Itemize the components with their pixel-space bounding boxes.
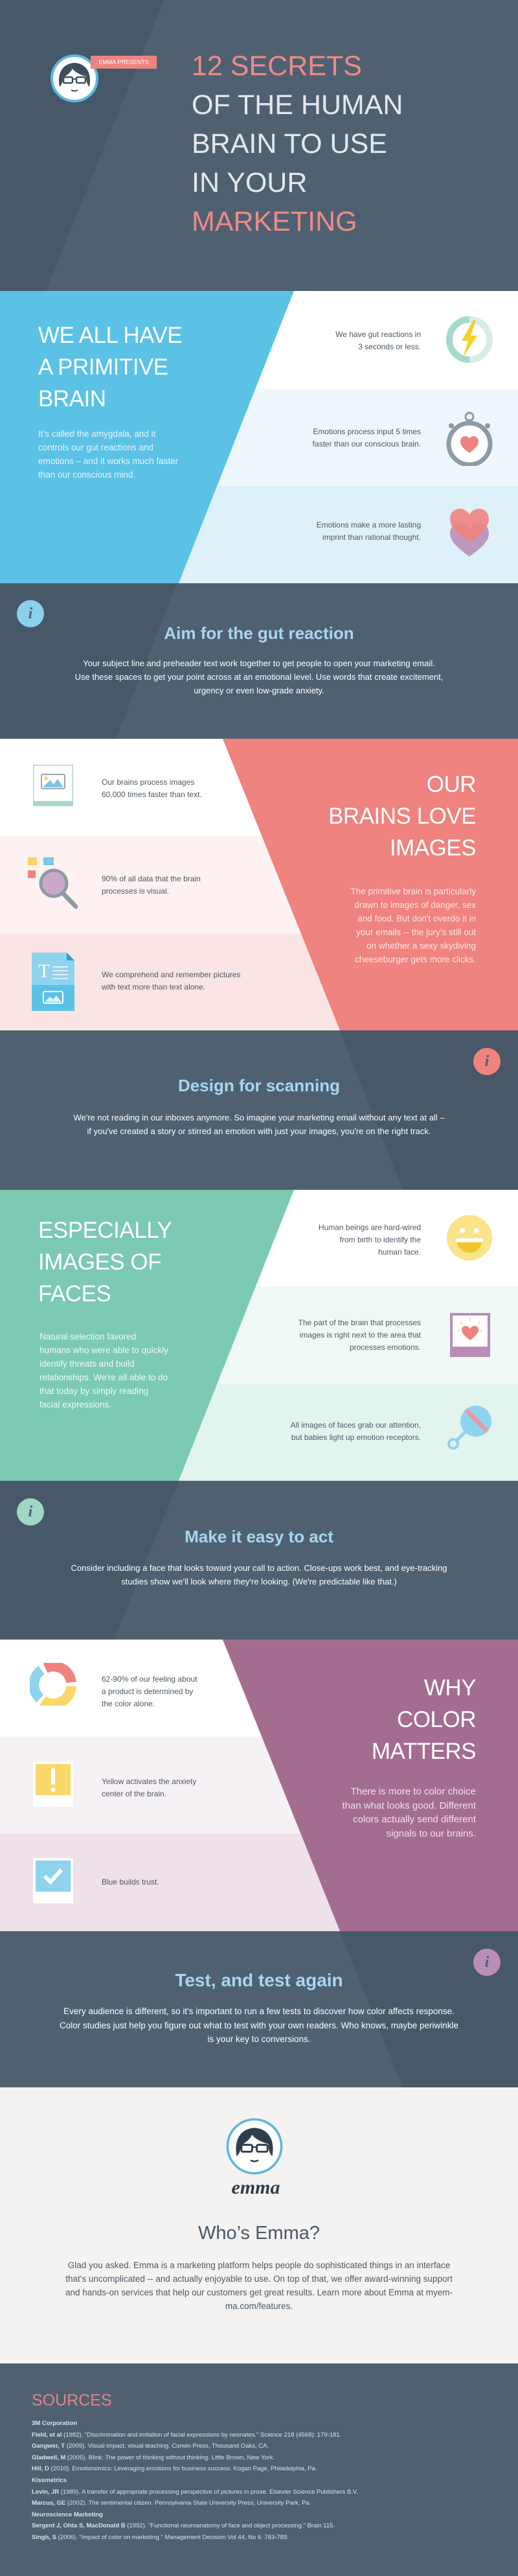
text: source list [32, 2420, 358, 2541]
text: yellow anxiety [102, 1777, 197, 1798]
panel: especially images of faces [0, 1190, 518, 1481]
panel: aim for the gut reaction [0, 583, 518, 739]
text: yellow anxiety: Yellow activates the anxiety [102, 1777, 196, 1786]
heading: who's emma: Who’s Emma? [198, 2223, 320, 2244]
panel: test and test again [0, 1931, 518, 2087]
text: source list: Sergent J, Ohta S, MacDonald B (1992). "Functional neuroanatomy of face and object processing." Brain 115. [32, 2522, 335, 2529]
text: primitive brain drawn: The primitive brain is partic­ularly drawn to images of danger, sex and food. But don't overdo it in your emails -- the jury's still out on whether a sexy skydiv­ing cheeseburger gets more clicks. [350, 887, 476, 964]
icon: stopwatch [447, 412, 492, 466]
text: color choice: There is more to color choice than what looks good. Different colors actually send different signals to our brains. [342, 1786, 476, 1839]
text: blue trust: Blue builds trust. [102, 1877, 159, 1886]
text: act body [71, 1563, 447, 1586]
heading: why color matters [372, 1675, 476, 1764]
heading: make it easy to act: Make it easy to act [185, 1527, 333, 1546]
text: hard-wired: from birth to identify the [340, 1235, 421, 1244]
text: act body: Consider including a face that looks toward your call to action. Close-ups work best, and eye-tracking [71, 1563, 447, 1573]
title: BRAIN TO USE [192, 128, 387, 159]
icon: info green [17, 1498, 44, 1526]
text: amygdala: It’s called the amygdala, and it controls our gut reactions and emotions – and it works much faster than our conscious mind. [38, 429, 178, 480]
text: source list: Marcus, GE (2002). The sentimental citizen. Pennsylvania State University Press, University Park, Pa. [32, 2500, 311, 2507]
text: emma body: Glad you asked. Emma is a marketing platform helps people do sophisticated things in an interface [68, 2260, 450, 2270]
text: hard-wired: human face. [378, 1247, 421, 1257]
text: act body: studies show we'll look where they're looking. (We're predictable like that.) [121, 1577, 397, 1586]
title: 12 SECRETS [192, 51, 362, 82]
icon: info green: i [28, 1503, 32, 1520]
title: OF THE HUMAN [192, 89, 403, 121]
panel: sources [0, 2363, 518, 2576]
text: 90% visual: 90% of all data that the brain [102, 874, 201, 883]
text: aim body: Your subject line and preheader text work together to get people to open your marketing email. [83, 658, 435, 668]
icon: two hearts [450, 509, 489, 557]
text: source list: Kissmetrics [32, 2477, 67, 2484]
text: test body: Color studies just help you figure out what to test with your own readers. Who knows, maybe periwinkle [60, 2021, 458, 2030]
icon: color donut [30, 1663, 76, 1706]
panel: our brains love images [0, 739, 518, 1030]
text: emma body: and hands-on services that help our customers get great results. Learn more about Emma at myem- [65, 2288, 453, 2297]
text: hard-wired [319, 1223, 421, 1257]
text: scanning body [73, 1113, 445, 1136]
panel: why color matters [0, 1640, 518, 1931]
text: emma body [65, 2260, 453, 2311]
text: brain processes images next to emotions: The part of the brain that processes [298, 1318, 421, 1327]
title [192, 51, 403, 237]
text: natural selection: Natural selection favored humans who were able to quickly identify threats and build relationships. We're all able to do that today by simply reading facial expressions. [39, 1332, 168, 1410]
icon: magnifier [28, 857, 78, 909]
icon: emma logo [227, 2118, 282, 2175]
text: babies [290, 1421, 421, 1442]
heading: especially images of faces: ESPECIALLY [38, 1218, 172, 1243]
icon: info pink [473, 1048, 501, 1075]
icon: emma avatar [51, 54, 98, 102]
heading: why color matters: COLOR [397, 1707, 476, 1732]
heading: design for scanning: Design for scanning [178, 1076, 340, 1095]
title: IN YOUR [192, 167, 307, 198]
panel: design for scanning [0, 1030, 518, 1190]
heading: test and test again: Test, and test again [175, 1970, 343, 1990]
text: 90% visual [102, 874, 201, 896]
text: source list: Field, et al (1982). "Discrimination and imitation of facial expressions by neonates." Science 218 (4568): 179-181. [32, 2431, 341, 2439]
heading: why color matters: MATTERS [372, 1739, 476, 1764]
text: source list: 3M Corporation [32, 2420, 77, 2427]
text: pictures with text: We comprehend and remember pictures [102, 970, 241, 979]
text: brain processes images next to emotions [298, 1318, 421, 1352]
text: emotions 5 times [312, 427, 421, 448]
text: hard-wired: Human beings are hard-wired [319, 1223, 421, 1232]
icon: info blue: i [28, 605, 32, 622]
icon: rattle [447, 1406, 491, 1450]
badge: emma presents [91, 56, 157, 69]
badge: emma presents: EMMA PRESENTS [98, 59, 149, 65]
text: emma body: that's uncomplicated -- and actually enjoyable to use. On top of that, we offer award-winning support [65, 2274, 453, 2284]
heading: especially images of faces [38, 1218, 172, 1306]
text: 60,000 times [102, 778, 202, 799]
text: gut reactions: We have gut reactions in [335, 330, 421, 339]
heading: our brains love images: BRAINS LOVE [328, 804, 476, 829]
icon: info pink: i [485, 1053, 489, 1070]
icon: yellow alert [33, 1761, 73, 1807]
text: aim body [75, 658, 443, 695]
text: pictures with text [102, 970, 241, 992]
icon: picture frame [33, 765, 73, 806]
heading: our brains love images: OUR [427, 772, 476, 797]
heading: we all have a primitive brain: BRAIN [38, 386, 106, 412]
icon: heart frame [450, 1313, 490, 1357]
icon: document: T [38, 960, 50, 982]
heading: our brains love images [328, 772, 476, 861]
text: test body [60, 2006, 458, 2044]
text: gut reactions: 3 seconds or less. [358, 342, 421, 351]
text: test body: is your key to conversions. [207, 2034, 311, 2044]
text: lasting imprint: imprint than rational thought. [322, 533, 421, 542]
title: MARKETING [192, 206, 357, 237]
text: source list: Singh, S (2006). "Impact of color on marketing." Management Decision Vol 44, No 6: 783-789. [32, 2534, 289, 2541]
icon: info blue [17, 600, 44, 627]
text: aim body: Use these spaces to get your point across at an emotional level. Use words that create excitement, [75, 672, 443, 682]
text: test body: Every audience is different, so it's important to run a few tests to discover how color affects response. [63, 2006, 455, 2016]
heading: especially images of faces: IMAGES OF [38, 1249, 161, 1275]
heading: we all have a primitive brain [38, 323, 182, 412]
heading: our brains love images: IMAGES [390, 835, 476, 861]
text: lasting imprint [317, 520, 421, 542]
text: lasting imprint: Emotions make a more lasting [317, 520, 421, 529]
icon: blue check [33, 1858, 73, 1903]
text: 90% visual: processes is visual. [102, 887, 169, 896]
icon: smiley [447, 1215, 492, 1260]
icon: info purple: i [485, 1954, 489, 1971]
heading: aim for the gut reaction: Aim for the gut reaction [164, 623, 354, 643]
heading: we all have a primitive brain: A PRIMITIVE [38, 354, 168, 380]
text: scanning body: if you've created a story or stirred an emotion with just your images, you're on the right track. [87, 1126, 431, 1136]
text: source list: Gangwer, T (2009). Visual impact, visual teaching. Corwin Press, Thousand Oaks, CA. [32, 2443, 269, 2450]
text: emotions 5 times: faster than our conscious brain. [313, 439, 421, 448]
text: 60,000 times: Our brains process images [102, 778, 194, 787]
text: yellow anxiety: center of the brain. [102, 1789, 166, 1798]
panel: make it easy to act [0, 1481, 518, 1640]
text: emotions 5 times: Emotions process input 5 times [313, 427, 421, 436]
text: source list: Hill, D (2010). Emotionomics: Leveraging emotions for business success. Kogan Page, Philadelphia, Pa. [32, 2465, 317, 2472]
text: scanning body: We're not reading in our inboxes anymore. So imagine your marketing email without any text at all – [73, 1113, 445, 1122]
icon: document [32, 953, 74, 1011]
text: brain processes images next to emotions: images is right next to the area that [300, 1330, 421, 1340]
text: 60,000 times: 60,000 times faster than text. [102, 790, 202, 799]
text: gut reactions [335, 330, 421, 351]
text: 62-90%: a product is determined by [102, 1687, 193, 1696]
heading: especially images of faces: FACES [38, 1281, 111, 1306]
text: emma body: ma.com/features. [225, 2301, 293, 2311]
heading: we all have a primitive brain: WE ALL HAVE [38, 323, 182, 348]
text: pictures with text: with text more than text alone. [102, 982, 205, 992]
text: source list: Gladwell, M (2005). Blink: The power of thinking without thinking. Little Brown, New York. [32, 2454, 275, 2461]
text: brain processes images next to emotions: processes emotions. [350, 1343, 421, 1352]
text: source list: Neuroscience Marketing [32, 2511, 103, 2518]
text: 62-90%: the color alone. [102, 1699, 155, 1708]
heading: why color matters: WHY [424, 1675, 476, 1700]
text: 62-90%: 62-90% of our feeling about [102, 1675, 197, 1684]
text: 62-90% [102, 1675, 197, 1708]
icon: lightning ring [446, 316, 493, 363]
panel: who's emma [0, 2087, 518, 2363]
text: babies: but babies light up emotion receptors. [291, 1433, 421, 1442]
text: aim body: urgency or even low-grade anxiety. [194, 686, 324, 695]
heading: sources: SOURCES [32, 2391, 112, 2409]
panel: primitive brain [0, 291, 518, 583]
logo text: emma: emma [232, 2177, 280, 2198]
icon: info purple [473, 1949, 501, 1976]
header section [0, 0, 518, 291]
text: babies: All images of faces grab our attention, [291, 1421, 421, 1430]
text: source list: Levin, JR (1989). A transfer of appropriate processing perspective of pictures in prose. Elsevier Science Publishers B.V. [32, 2489, 358, 2496]
